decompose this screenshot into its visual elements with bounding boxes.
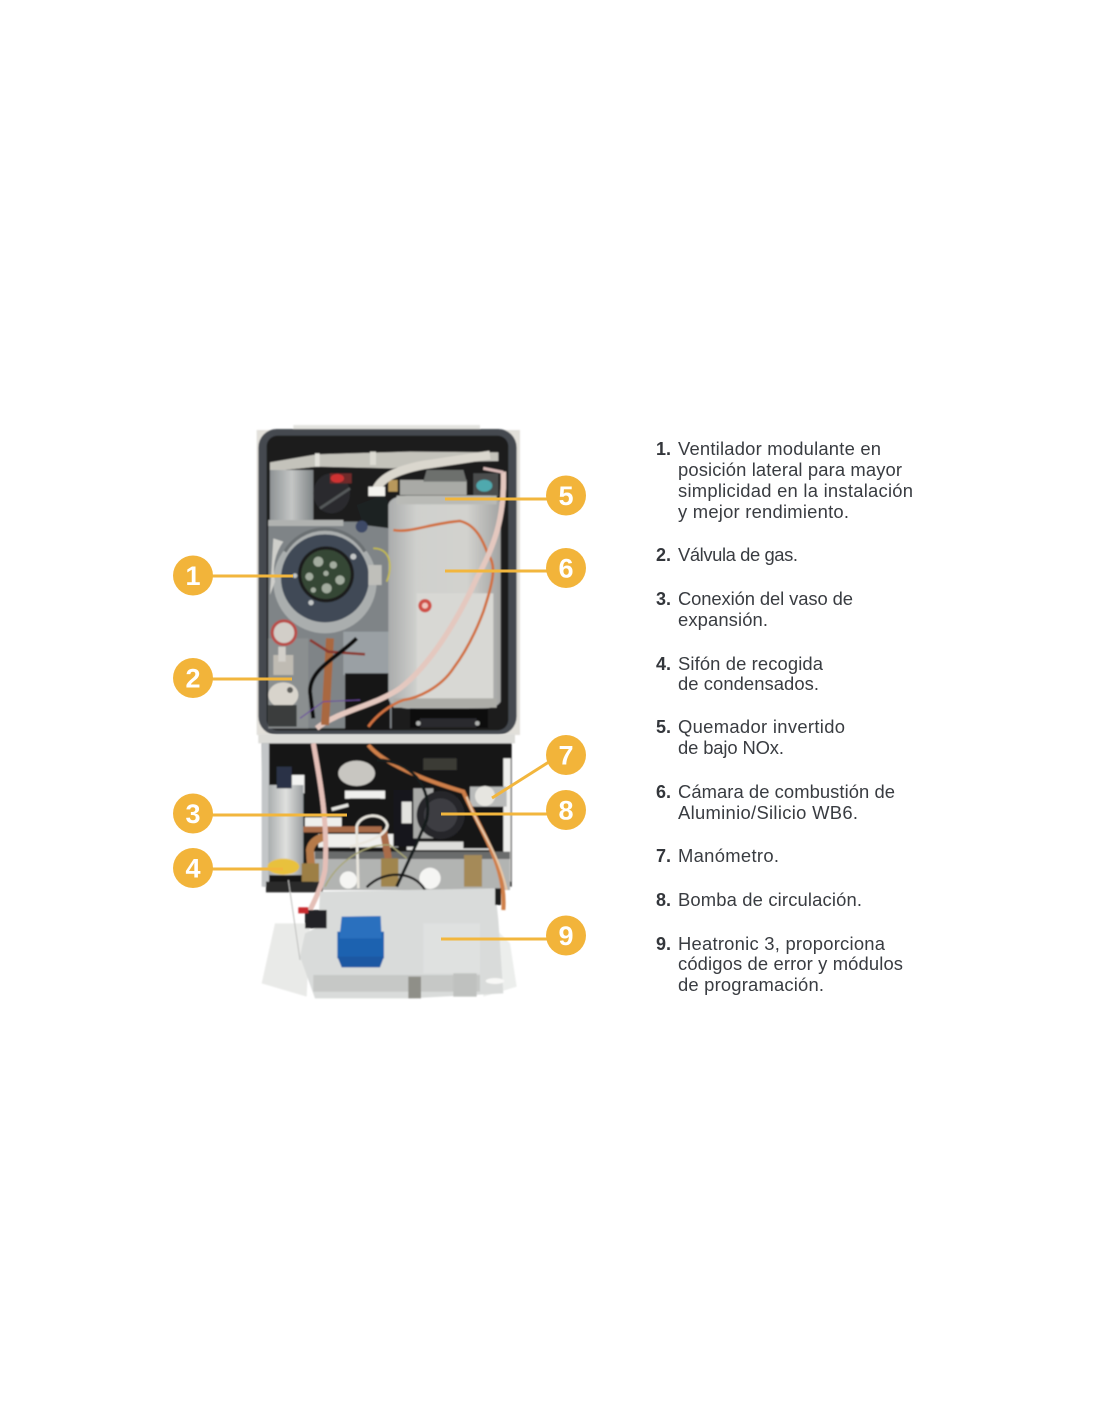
boiler upper section: combustion compartment: [257, 425, 520, 735]
item 3 text: [656, 588, 853, 630]
item 2 text: Válvula de gas.: [678, 544, 798, 565]
left flue pipe: [270, 470, 313, 525]
item 4 text: de condensados.: [678, 673, 819, 694]
item 6 text: Aluminio/Silicio WB6.: [678, 802, 858, 823]
callout 6: combustion chamber: [445, 548, 586, 588]
item 9 text: [656, 933, 903, 995]
brass fittings: [302, 863, 319, 882]
item 1 text: [656, 438, 913, 522]
callout 3: expansion vessel connection: [173, 794, 347, 834]
dark valve block: [313, 473, 350, 513]
red logo: [418, 599, 432, 612]
copper and black pipes: [325, 638, 330, 725]
item 3 text: Conexión del vaso de: [678, 588, 853, 609]
item 1 text: simplicidad en la instalación: [678, 480, 913, 501]
callout 4: condensate siphon: [173, 848, 283, 888]
item 6 text: [656, 781, 895, 823]
combustion chamber: [388, 496, 501, 708]
bottom burner grille: [410, 708, 488, 728]
control unit body: [300, 888, 503, 998]
callout 4: condensate siphon: 4: [185, 854, 201, 884]
item 4 text: 4.: [656, 654, 671, 674]
item 1 text: y mejor rendimiento.: [678, 501, 849, 522]
gas valve block: [273, 655, 293, 675]
manometer disc: [271, 619, 297, 646]
item 9 text: de programación.: [678, 974, 824, 995]
item 9 text: 9.: [656, 934, 671, 954]
callout 3: expansion vessel connection: 3: [185, 799, 201, 829]
boiler lower section: hydraulics and control unit: [258, 734, 517, 998]
callout 7: pressure gauge: [492, 735, 586, 798]
callout 2: gas valve: 2: [185, 664, 201, 694]
item 6 text: 6.: [656, 782, 671, 802]
siphon: [268, 785, 303, 875]
fan assembly: [273, 530, 377, 633]
item 1 text: Ventilador modulante en: [678, 438, 881, 459]
boiler photo illustration: [257, 425, 520, 998]
item 8 text: 8.: [656, 890, 671, 910]
gas fittings: [357, 495, 398, 528]
item 7 text: Manómetro.: [678, 845, 779, 866]
callout 6: combustion chamber: 6: [558, 554, 574, 584]
item 5 text: 5.: [656, 717, 671, 737]
item 1 text: 1.: [656, 439, 671, 459]
item 3 text: expansión.: [678, 609, 768, 630]
top manifold: [270, 452, 498, 472]
background plate: [268, 522, 392, 728]
item 1 text: posición lateral para mayor: [678, 459, 902, 480]
pink hose: [310, 743, 326, 910]
callout 8: circulation pump: [441, 790, 586, 830]
callout 9: control unit: 9: [558, 921, 574, 951]
item 6 text: Cámara de combustión de: [678, 781, 895, 802]
window cut-outs: [292, 775, 304, 793]
teal sensor: [473, 473, 498, 497]
callout 8: circulation pump: 8: [558, 796, 574, 826]
pink hose: [317, 472, 503, 728]
callout 5: burner: [445, 476, 586, 516]
callout 5: burner: 5: [558, 481, 574, 511]
white hose top: [375, 455, 490, 493]
item 5 text: [656, 716, 845, 758]
item 9 text: códigos de error y módulos: [678, 953, 903, 974]
item 8 text: Bomba de circulación.: [678, 889, 862, 910]
yellow siphon band: [267, 859, 299, 875]
item 5 text: Quemador invertido: [678, 716, 845, 737]
black connector and red tip: [305, 910, 327, 928]
callout 1: fan: 1: [185, 561, 201, 591]
item 7 text: 7.: [656, 846, 671, 866]
manometer: [470, 787, 507, 807]
burner cap: [400, 480, 467, 495]
wires: [368, 745, 504, 910]
bracket plate: [313, 852, 510, 890]
orange sensor wires: [368, 521, 493, 727]
item 9 text: Heatronic 3, proporciona: [678, 933, 886, 954]
gas cock dark fitting: [335, 798, 390, 818]
copper pipes: [303, 820, 382, 838]
callout 1: fan: [173, 556, 293, 596]
pump body: [393, 790, 417, 847]
item 5 text: de bajo NOx.: [678, 737, 784, 758]
callout 2: gas valve: [173, 658, 292, 698]
translucent lid: [262, 923, 310, 997]
bottom rail: [266, 882, 323, 892]
item 3 text: 3.: [656, 589, 671, 609]
callout 7: pressure gauge: 7: [558, 740, 574, 770]
inner vessel: [338, 761, 375, 786]
item 4 text: [656, 653, 824, 694]
callout 9: control unit: [441, 916, 586, 956]
blue transformer: [337, 932, 384, 958]
item 2 text: 2.: [656, 545, 671, 565]
legend list: [656, 438, 913, 995]
item 4 text: Sifón de recogida: [678, 653, 824, 674]
